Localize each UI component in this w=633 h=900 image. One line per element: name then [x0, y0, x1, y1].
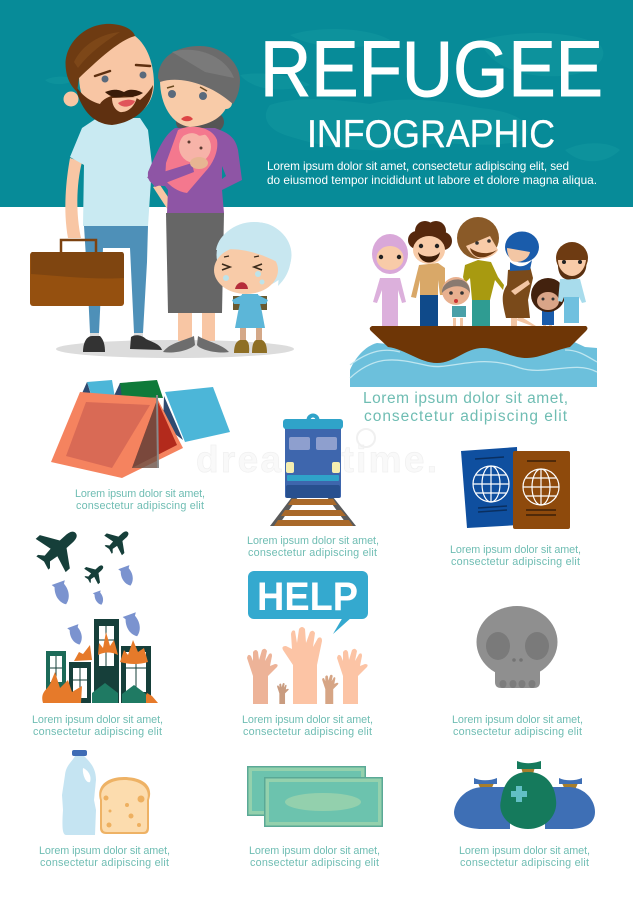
city caption — [32, 714, 163, 738]
icon: help speech bubble — [248, 571, 368, 634]
ground shadow — [56, 340, 294, 358]
skull caption: Lorem ipsum dolor sit amet, — [452, 714, 583, 726]
icon: burning city — [42, 619, 158, 703]
curly man — [408, 221, 452, 326]
mother with baby — [147, 46, 242, 353]
header description — [267, 159, 597, 187]
passport caption — [450, 544, 581, 568]
icon: water bottle and bread — [62, 750, 150, 835]
banknote caption: consectetur adipiscing elit — [250, 857, 379, 869]
passport caption: Lorem ipsum dolor sit amet, — [450, 544, 581, 556]
planes — [27, 516, 137, 588]
train caption: Lorem ipsum dolor sit amet, — [247, 535, 379, 547]
aid bags caption: consectetur adipiscing elit — [460, 857, 589, 869]
icon: passports — [461, 447, 570, 529]
bread caption: consectetur adipiscing elit — [40, 857, 169, 869]
bearded man — [457, 217, 504, 326]
skull caption: consectetur adipiscing elit — [453, 726, 582, 738]
father — [64, 24, 172, 352]
pregnant woman — [503, 232, 539, 326]
city caption: consectetur adipiscing elit — [33, 726, 162, 738]
title: REFUGEE — [260, 24, 603, 113]
tent caption — [75, 488, 205, 512]
child — [214, 222, 292, 353]
passport caption: consectetur adipiscing elit — [451, 556, 580, 568]
boat hull — [370, 326, 588, 363]
icon: raised hands — [247, 627, 368, 704]
watermark: dreamstime. — [196, 439, 437, 480]
boat caption: consectetur adipiscing elit — [364, 408, 568, 425]
header description: do eiusmod tempor incididunt ut labore et dolore magna aliqua. — [267, 173, 597, 187]
tent caption: Lorem ipsum dolor sit amet, — [75, 488, 205, 500]
city caption: Lorem ipsum dolor sit amet, — [32, 714, 163, 726]
icon: war planes and bombs — [27, 516, 144, 647]
icon: train — [270, 414, 356, 526]
icon: skull — [476, 606, 558, 688]
boat caption — [363, 390, 568, 425]
boat caption: Lorem ipsum dolor sit amet, — [363, 390, 568, 407]
water — [350, 340, 597, 387]
woman lilac — [372, 234, 408, 326]
girl — [531, 278, 565, 326]
bread caption — [39, 845, 170, 869]
bombs — [52, 565, 144, 647]
tent caption: consectetur adipiscing elit — [76, 500, 204, 512]
icon: aid bags — [454, 761, 595, 829]
woman light blue — [556, 242, 588, 323]
skull caption — [452, 714, 583, 738]
icon: help speech bubble: HELP — [257, 575, 358, 619]
aid bags caption — [459, 845, 590, 869]
boat people — [372, 217, 588, 326]
help caption: consectetur adipiscing elit — [243, 726, 372, 738]
refugee boat — [350, 217, 597, 387]
icon: banknotes — [247, 766, 383, 827]
suitcase — [30, 240, 124, 306]
header banner — [0, 0, 633, 207]
boy — [442, 277, 470, 326]
help caption: Lorem ipsum dolor sit amet, — [242, 714, 373, 726]
icon: tents — [51, 380, 230, 478]
train caption — [247, 535, 379, 559]
subtitle: INFOGRAPHIC — [307, 113, 555, 156]
aid bags caption: Lorem ipsum dolor sit amet, — [459, 845, 590, 857]
family illustration — [30, 24, 294, 358]
banknote caption — [249, 845, 380, 869]
help caption — [242, 714, 373, 738]
train caption: consectetur adipiscing elit — [248, 547, 377, 559]
header description: Lorem ipsum dolor sit amet, consectetur adipiscing elit, sed — [267, 159, 569, 173]
banknote caption: Lorem ipsum dolor sit amet, — [249, 845, 380, 857]
bread caption: Lorem ipsum dolor sit amet, — [39, 845, 170, 857]
